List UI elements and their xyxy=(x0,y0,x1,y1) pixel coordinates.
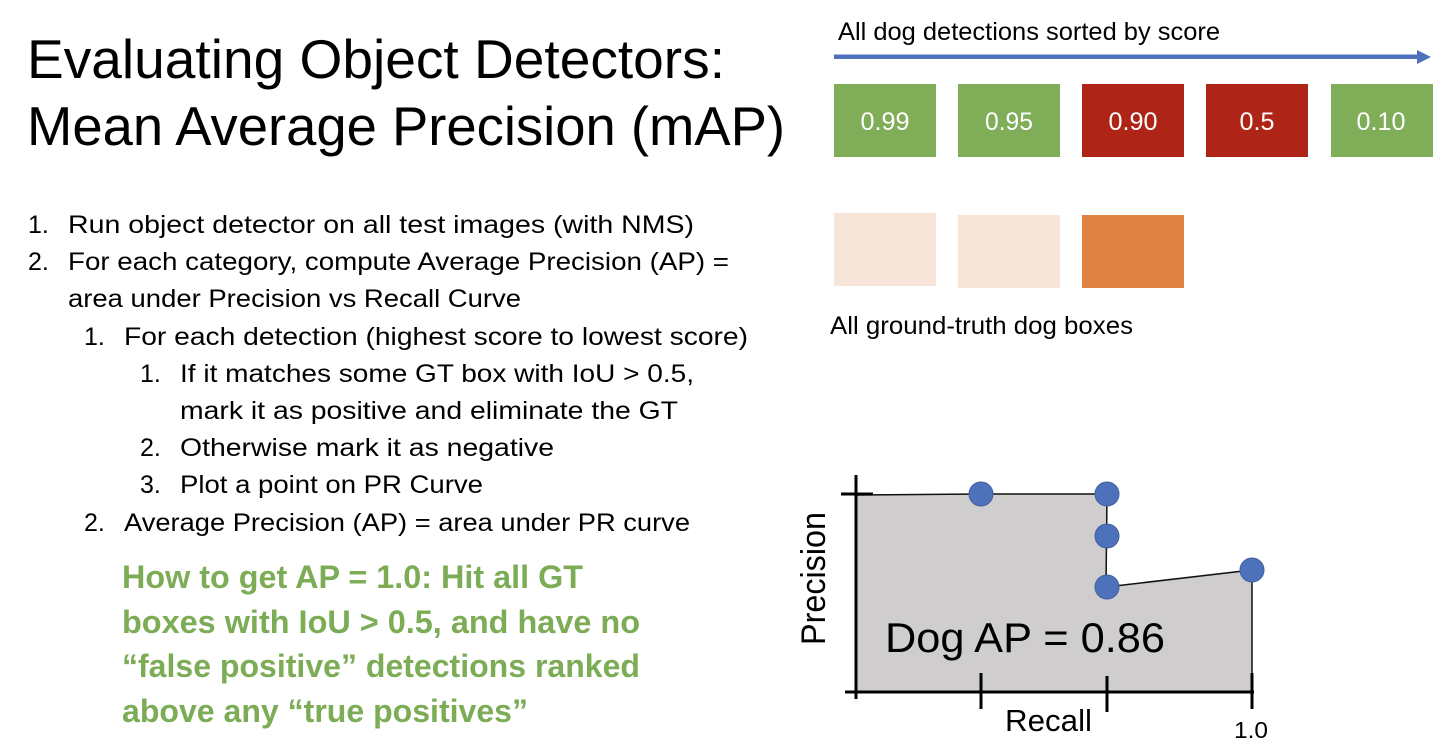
numbered procedure list: Plot a point on PR Curve xyxy=(180,471,483,499)
axes and ticks xyxy=(841,475,1254,712)
detection score boxes: 0.10 xyxy=(1356,108,1406,136)
y-axis label: Precision xyxy=(795,512,833,645)
numbered procedure list: 1. xyxy=(84,323,105,351)
numbered procedure list: 1. xyxy=(28,211,49,239)
numbered procedure list: 2. xyxy=(140,434,161,462)
PR curve line xyxy=(857,494,1252,692)
numbered procedure list: area under Precision vs Recall Curve xyxy=(68,285,521,313)
x-axis value 1.0: 1.0 xyxy=(1234,717,1268,743)
numbered procedure list: If it matches some GT box with IoU > 0.5, xyxy=(180,360,694,388)
precision-recall chart xyxy=(795,475,1268,743)
detection score boxes xyxy=(834,84,1433,157)
numbered procedure list: Run object detector on all test images (with NMS) xyxy=(68,211,694,239)
numbered procedure list xyxy=(28,211,748,537)
numbered procedure list: Average Precision (AP) = area under PR curve xyxy=(124,509,690,537)
numbered procedure list: For each category, compute Average Precision (AP) = xyxy=(68,248,729,276)
detection score boxes: 0.5 xyxy=(1240,108,1274,136)
numbered procedure list: 2. xyxy=(84,509,105,537)
area under PR curve xyxy=(857,494,1252,692)
numbered procedure list: Otherwise mark it as negative xyxy=(180,434,554,462)
title: Evaluating Object Detectors: xyxy=(27,28,725,90)
ground-truth boxes xyxy=(834,213,1184,288)
title xyxy=(27,28,785,157)
green callout: how to get AP = 1.0: How to get AP = 1.0: Hit all GT xyxy=(122,559,583,595)
detection score boxes: 0.95 xyxy=(985,108,1033,136)
label: ground-truth boxes: All ground-truth dog boxes xyxy=(830,312,1133,340)
numbered procedure list: 1. xyxy=(140,360,161,388)
label: Dog AP value: Dog AP = 0.86 xyxy=(885,614,1165,661)
arrow: score direction xyxy=(834,50,1431,64)
detection score boxes: 0.99 xyxy=(860,108,910,136)
numbered procedure list: mark it as positive and eliminate the GT xyxy=(180,397,678,425)
numbered procedure list: 3. xyxy=(140,471,161,499)
green callout: how to get AP = 1.0 xyxy=(122,559,640,729)
title: Mean Average Precision (mAP) xyxy=(27,95,785,157)
green callout: how to get AP = 1.0: “false positive” detections ranked xyxy=(122,648,640,684)
numbered procedure list: 2. xyxy=(28,248,49,276)
PR curve points xyxy=(969,482,1264,599)
heading: all dog detections: All dog detections sorted by score xyxy=(838,18,1220,46)
green callout: how to get AP = 1.0: boxes with IoU > 0.5, and have no xyxy=(122,604,640,640)
detection score boxes: 0.90 xyxy=(1108,108,1158,136)
green callout: how to get AP = 1.0: above any “true positives” xyxy=(122,693,528,729)
x-axis label: Recall xyxy=(1005,703,1092,738)
numbered procedure list: For each detection (highest score to lowest score) xyxy=(124,323,748,351)
